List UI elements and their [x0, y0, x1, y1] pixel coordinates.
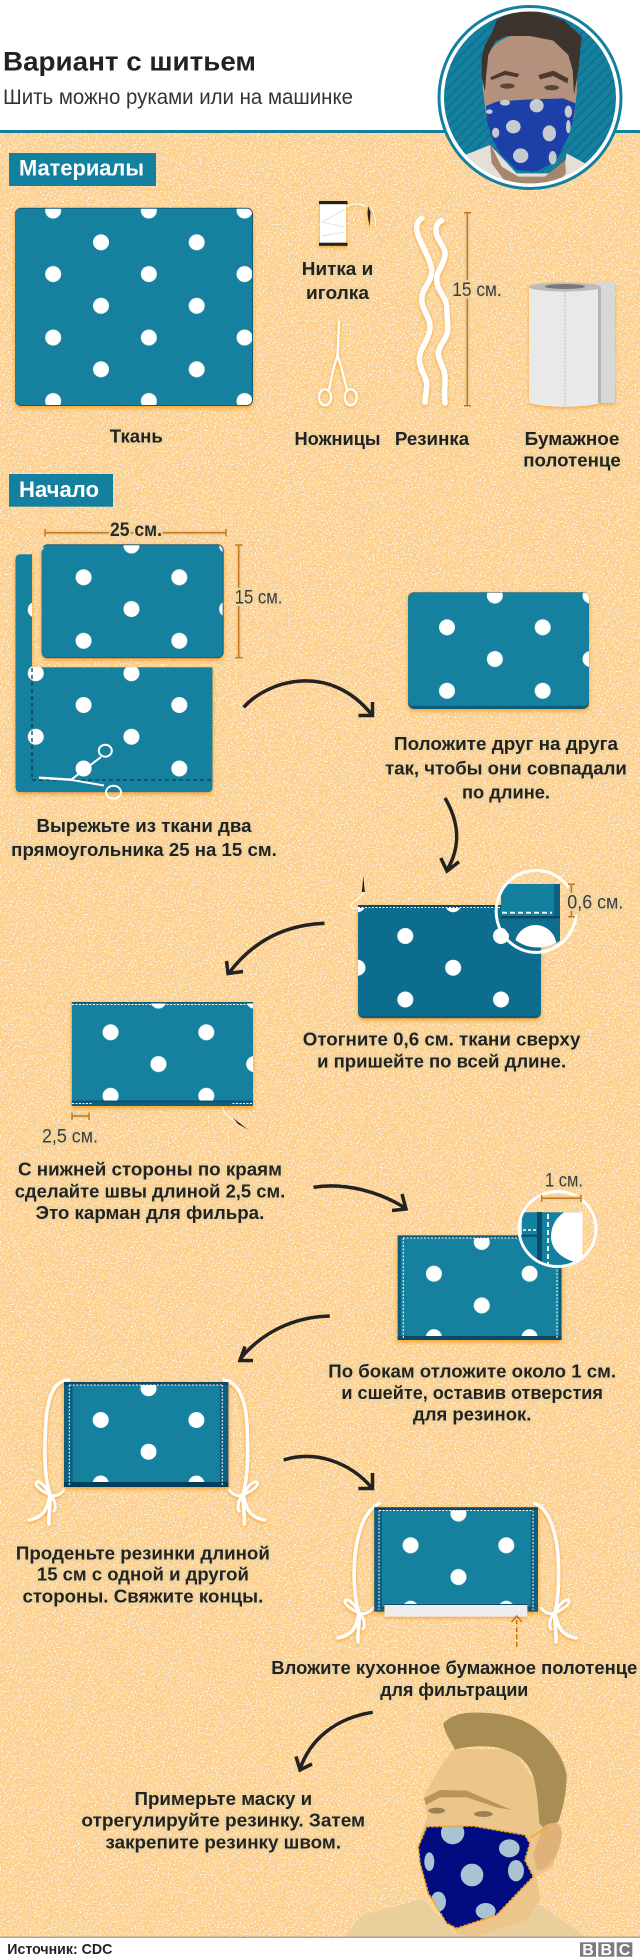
step 1 text line 2: прямоугольника 25 на 15 см. [11, 839, 277, 860]
shirt [345, 1898, 587, 1937]
section label: start [9, 474, 113, 507]
cut-out piece [42, 544, 224, 658]
dimension: 15 cm elastic [452, 213, 502, 406]
fabric swatch [15, 208, 253, 406]
section label: materials: Материалы [19, 156, 144, 180]
icon: spool and needle [319, 201, 375, 246]
step text: По бокам отложите около 1 см. [328, 1360, 616, 1381]
section label: start: Начало [19, 477, 99, 502]
step 6 text line 3: стороны. Свяжите концы. [22, 1585, 263, 1606]
arrow 7 [296, 1712, 373, 1770]
step text: Вложите кухонное бумажное полотенце [271, 1657, 637, 1678]
label: scissors: Ножницы [294, 428, 380, 449]
fabric stack [408, 592, 589, 709]
arrow 5 [240, 1316, 330, 1360]
fabric [374, 1507, 538, 1612]
neck and head [420, 1748, 562, 1937]
step 3: fold and stitch top [303, 870, 623, 1050]
dimension: 25 cm: 25 см. [110, 520, 162, 541]
step text: Отогните 0,6 см. ткани сверху [303, 1029, 581, 1050]
icon: needle [351, 876, 365, 908]
portrait of man wearing a mask [439, 6, 621, 190]
logo: BBC: B [601, 1942, 612, 1959]
fabric [398, 1235, 562, 1340]
label: paper towel line 2: полотенце [523, 450, 621, 471]
ear loop [531, 1827, 547, 1837]
step 4 text line 3: Это карман для фильра. [36, 1202, 264, 1223]
dimension: 15 cm: 15 см. [235, 587, 282, 608]
footer [0, 1937, 640, 1960]
dimension: 15 cm elastic: 15 см. [452, 280, 502, 301]
inset magnifier [519, 1192, 596, 1270]
arrow 1 [244, 681, 372, 716]
icon: scissors on fabric [39, 745, 121, 799]
dimension: 2.5 cm [42, 1112, 98, 1147]
arrow 6 [284, 1456, 372, 1488]
label: elastic: Резинка [395, 428, 470, 449]
subtitle: Шить можно руками или на машинке [3, 85, 353, 109]
fabric [64, 1382, 228, 1487]
dimension: 25 cm [45, 520, 226, 541]
icon: elastic bands [417, 218, 448, 403]
dimension: 2.5 cm: 2,5 см. [42, 1126, 98, 1147]
profile photo of man in mask [345, 1713, 587, 1937]
fabric [358, 905, 541, 1018]
inset magnifier [496, 870, 576, 967]
step 4 text line 2: сделайте швы длиной 2,5 см. [15, 1180, 285, 1201]
panel: materials [15, 201, 621, 471]
dimension: 1 cm: 1 см. [545, 1171, 583, 1192]
step 6 text line 2: 15 см с одной и другой [37, 1564, 249, 1585]
label: fabric: Ткань [110, 426, 163, 447]
fabric with cut piece [16, 554, 212, 792]
elastic loops and bows [338, 1503, 576, 1642]
source: Источник: CDC [7, 1941, 112, 1958]
step 6: thread elastic [16, 1380, 270, 1563]
step text: Вырежьте из ткани два [36, 815, 252, 836]
icon: paper towel roll [529, 282, 615, 407]
step 7: insert filter [271, 1503, 637, 1678]
logo: BBC: C [619, 1942, 631, 1959]
step 2: stacked rectangles [394, 592, 619, 754]
ear [533, 1823, 562, 1870]
step 1: cut two rectangles [16, 520, 282, 836]
fabric [72, 1002, 253, 1106]
icon: needle [222, 1107, 248, 1130]
label: paper towel: Бумажное [525, 428, 619, 449]
step text: Положите друг на друга [394, 733, 619, 754]
icon: scissors [319, 321, 357, 405]
step 8 text line 2: отрегулируйте резинку. Затем [81, 1810, 365, 1831]
arrow 3 [226, 923, 324, 974]
step 5 text line 2: и сшейте, оставив отверстия [341, 1382, 603, 1403]
logo: BBC: B [582, 1942, 594, 1959]
label: thread and needle line 2: иголка [306, 282, 370, 303]
orange insertion arrow [512, 1616, 522, 1647]
brows and eyes [424, 1790, 512, 1810]
step 4: bottom seams [18, 1002, 282, 1180]
step 8 text line 3: закрепите резинку швом. [106, 1831, 341, 1852]
arrow 4 [314, 1186, 406, 1210]
step 8 text: Примерьте маску и [134, 1788, 312, 1809]
step 5: side seams [328, 1171, 616, 1381]
step 7 text line 2: для фильтрации [380, 1679, 528, 1700]
label: thread and needle: Нитка и [302, 258, 373, 279]
step 2 text line 2: так, чтобы они совпадали [385, 757, 627, 778]
mask [418, 1826, 533, 1928]
step text: Проденьте резинки длиной [16, 1542, 270, 1563]
step 3 text line 2: и пришейте по всей длине. [317, 1050, 566, 1071]
dimension: 1 cm [542, 1171, 583, 1202]
dimension: 15 cm [235, 545, 282, 658]
paper towel filter [384, 1604, 527, 1617]
dimension: 0.6 cm [567, 884, 623, 917]
step text: С нижней стороны по краям [18, 1159, 282, 1180]
step 5 text line 3: для резинок. [413, 1404, 531, 1425]
cut line [32, 668, 213, 780]
hair [443, 1713, 567, 1828]
logo: BBC [580, 1942, 632, 1959]
title: Вариант с шитьем [3, 46, 256, 76]
elastic loops and bows [29, 1380, 264, 1524]
arrow 2 [441, 798, 459, 871]
step 2 text line 3: по длине. [462, 781, 550, 802]
section label: materials [9, 153, 156, 186]
dimension: 0.6 cm: 0,6 см. [567, 892, 623, 913]
